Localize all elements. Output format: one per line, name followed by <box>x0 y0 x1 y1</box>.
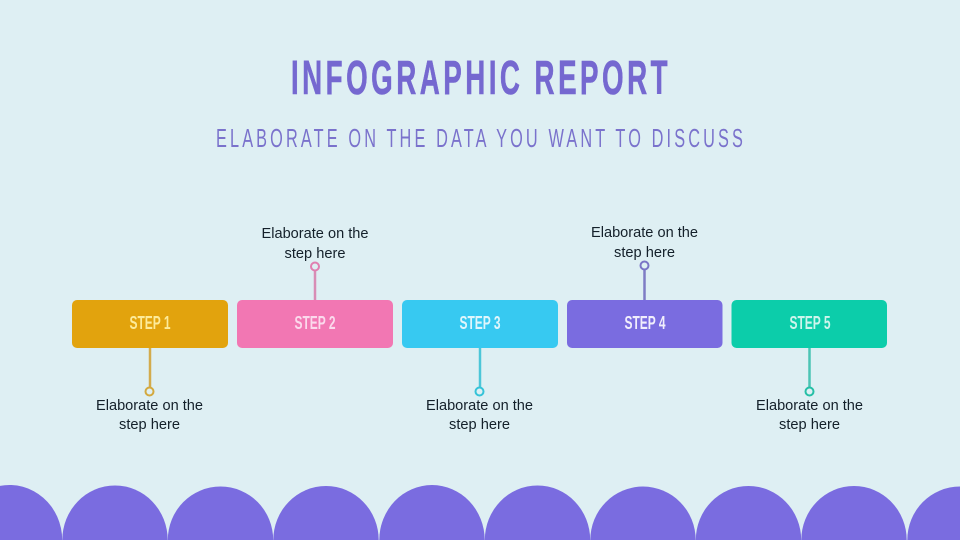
step 5 marker <box>806 388 814 396</box>
step 3 label: STEP 3 <box>460 313 500 333</box>
step 4 description <box>591 225 698 261</box>
step 5 <box>732 300 887 433</box>
scalloped footer <box>0 485 960 540</box>
step 5 label: STEP 5 <box>790 313 830 333</box>
step 4 description: Elaborate on the <box>591 225 698 241</box>
step 2 description: step here <box>284 246 346 262</box>
step 5 description <box>756 398 863 433</box>
step 5 description: step here <box>779 417 840 433</box>
title: INFOGRAPHIC REPORT <box>291 52 671 105</box>
step 3 <box>402 300 558 433</box>
step 4 marker <box>640 262 648 270</box>
step 2 connector <box>314 271 316 300</box>
step 3 description <box>426 398 533 433</box>
step 4 label: STEP 4 <box>624 313 666 333</box>
step 1 label: STEP 1 <box>130 313 170 333</box>
step 3 description: step here <box>449 417 510 433</box>
step 2 description: Elaborate on the <box>262 226 368 242</box>
step 1 box <box>72 300 228 348</box>
step 3 description: Elaborate on the <box>426 398 533 414</box>
step 1 <box>72 300 228 433</box>
step 3 box <box>402 300 558 348</box>
step 5 connector <box>808 348 811 387</box>
step 2 box <box>237 300 393 348</box>
step 1 description: Elaborate on the <box>96 398 203 414</box>
step 5 box <box>732 300 887 348</box>
step 2 marker <box>311 262 319 270</box>
step 2 label: STEP 2 <box>294 313 336 333</box>
step 5 description: Elaborate on the <box>756 398 863 414</box>
step 1 description <box>96 398 203 433</box>
step 2 <box>237 226 393 348</box>
step 1 connector <box>149 348 151 387</box>
step 1 marker <box>146 388 154 396</box>
step 4 connector <box>643 270 646 300</box>
step 1 description: step here <box>119 417 180 433</box>
step 4 box <box>567 300 722 348</box>
step 4 description: step here <box>614 245 675 261</box>
step 2 description <box>262 226 368 262</box>
step 4 <box>567 225 722 348</box>
step 3 marker <box>476 388 484 396</box>
step 3 connector <box>479 348 481 387</box>
